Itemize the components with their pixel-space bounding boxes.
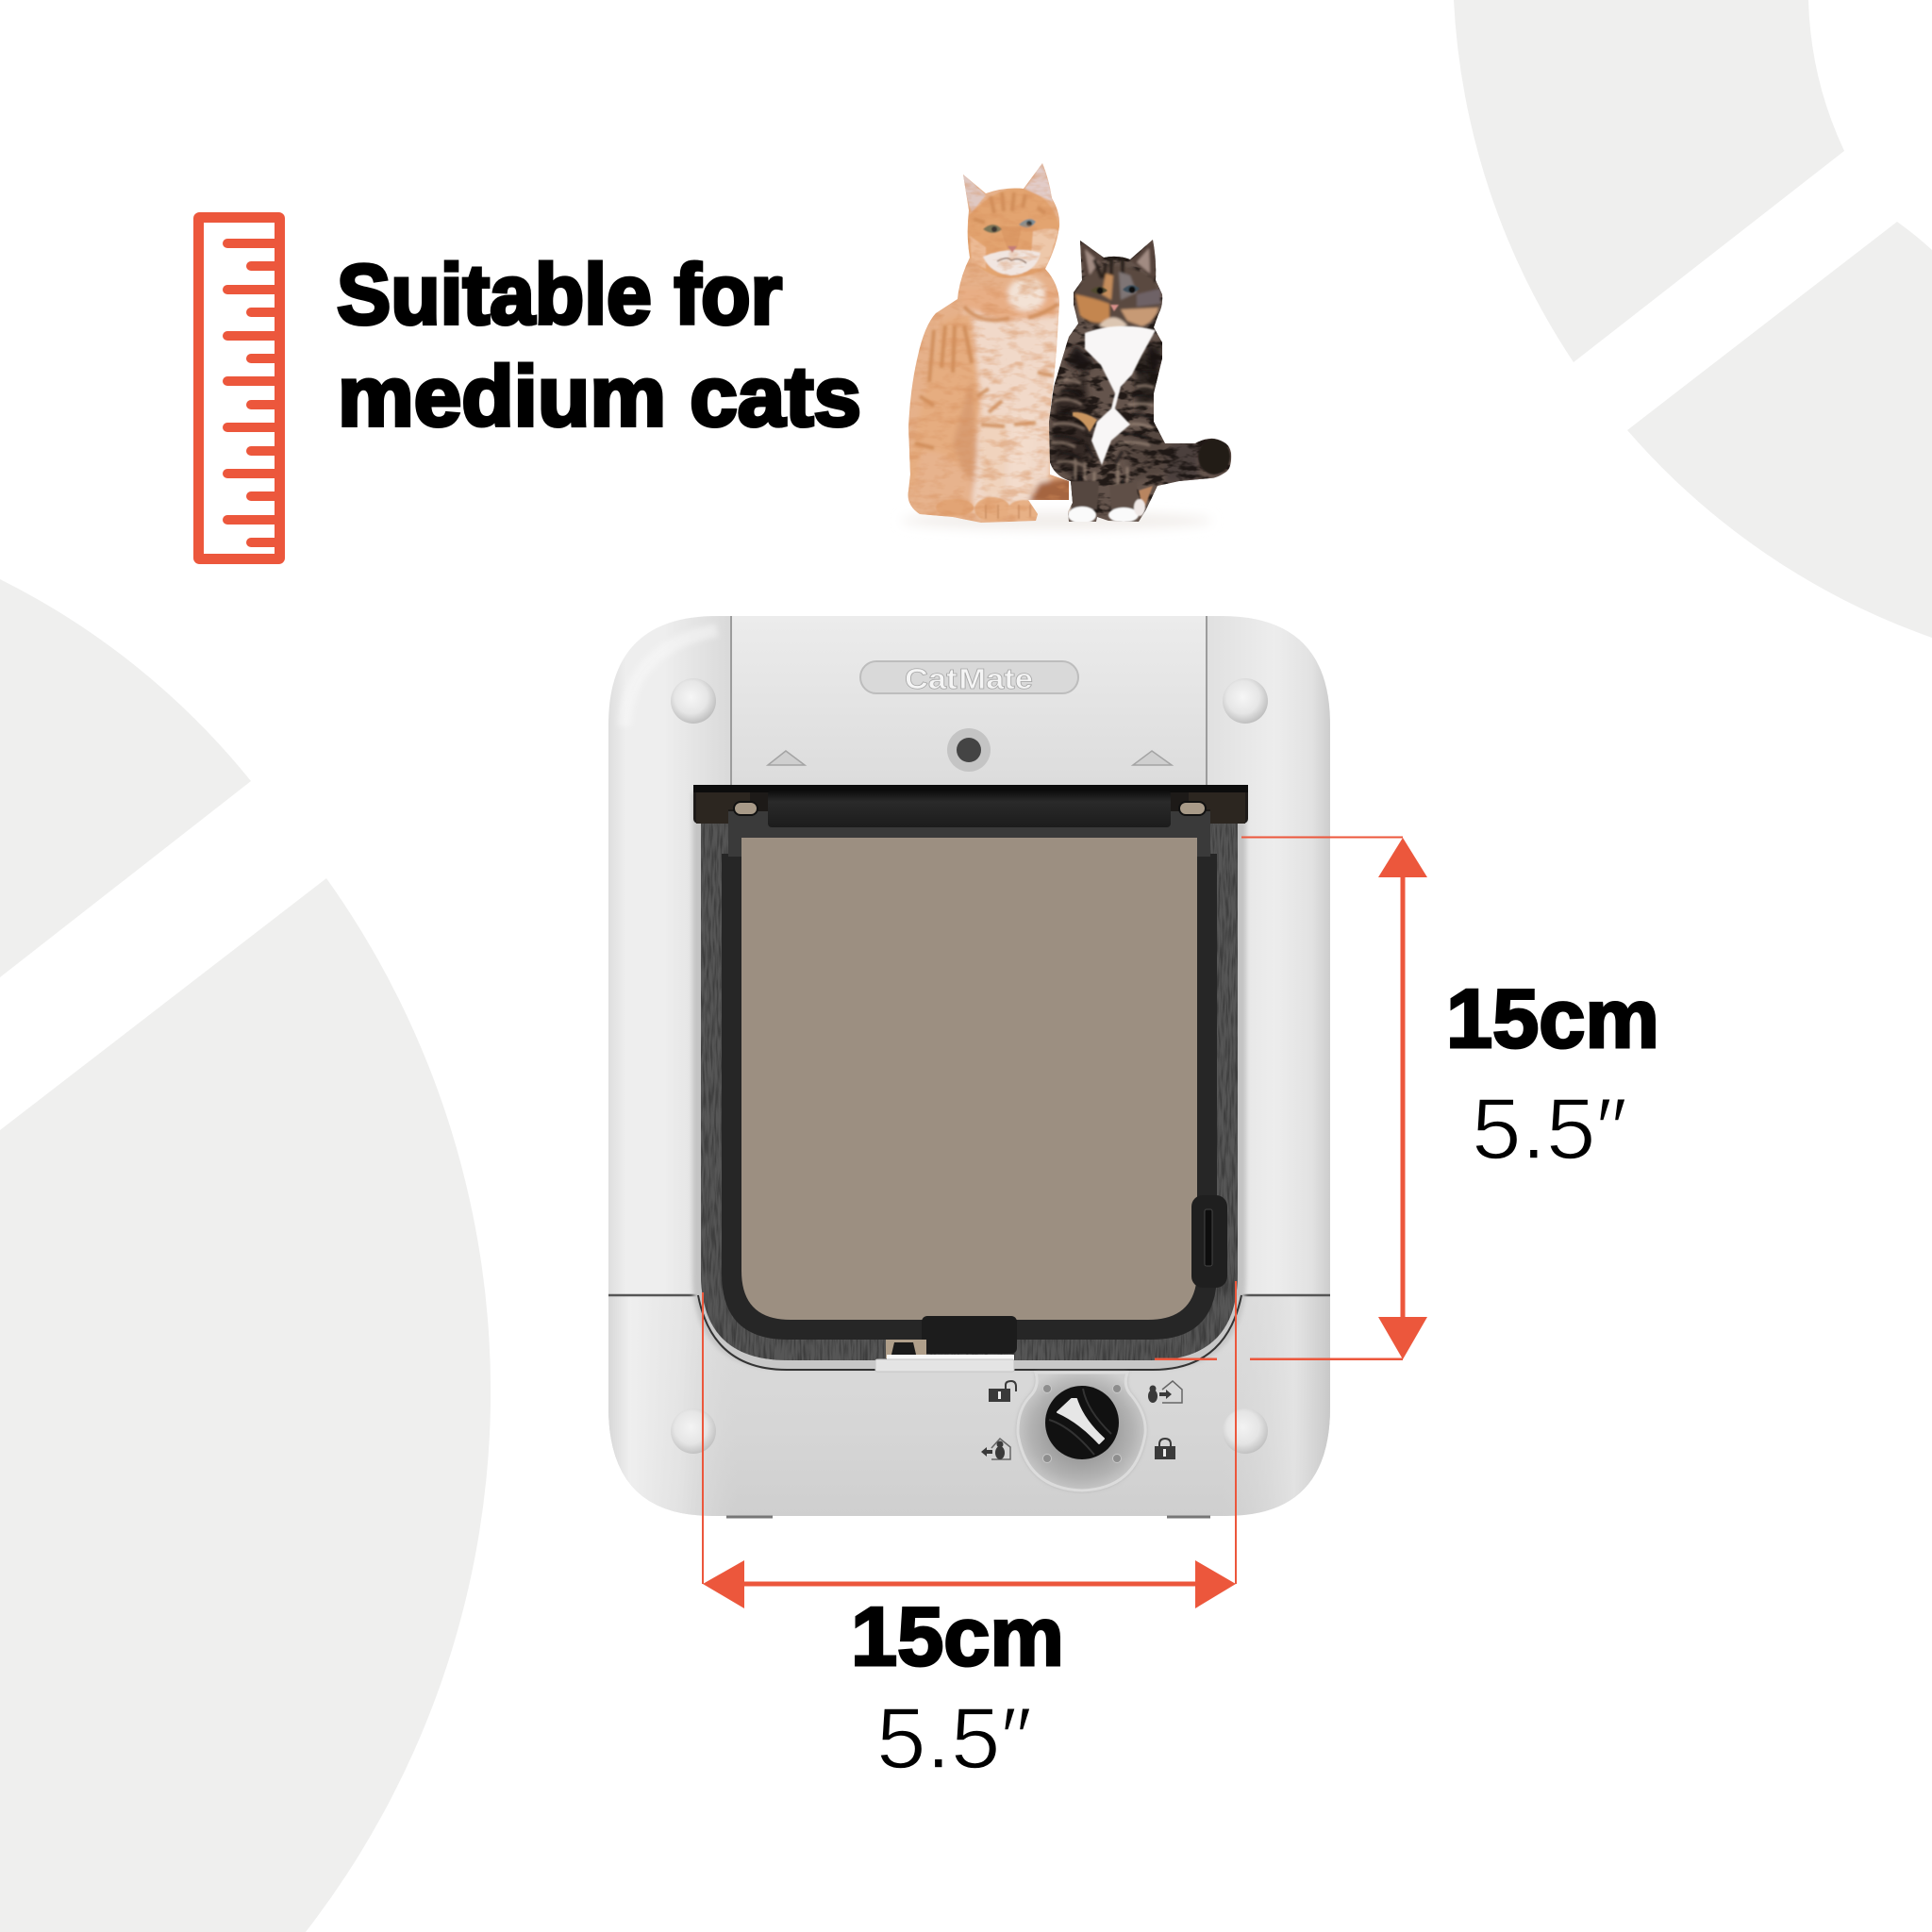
lower panel side shading: [608, 1295, 1330, 1516]
lower panel: [608, 1295, 1330, 1516]
label: height 15cm: 15cm: [1446, 972, 1659, 1065]
door halo: [692, 792, 1246, 1370]
icon: unlocked: [989, 1381, 1016, 1402]
bottom latch: [875, 1316, 1017, 1372]
heading: suitable for medium cats: [337, 248, 861, 444]
feet shadows: [726, 1515, 1210, 1519]
rotary lock: [1018, 1373, 1145, 1491]
heading: suitable for medium cats: medium cats: [338, 350, 861, 444]
top cover: [731, 616, 1207, 795]
top frame: [693, 785, 1248, 857]
heading: suitable for medium cats: Suitable for: [337, 248, 782, 342]
rim: [722, 854, 1217, 1340]
logo plate: Cat Mate: [905, 662, 1033, 695]
contour line: [698, 1295, 1241, 1370]
side clip: [1191, 1195, 1227, 1288]
sensor: [947, 728, 991, 772]
illustration: tortoiseshell cat: [1042, 236, 1236, 528]
logo plate: [860, 661, 1078, 695]
illustration: ginger cat: [901, 160, 1075, 528]
label: width 15cm: 15cm: [851, 1590, 1064, 1683]
background shape: bottom left ring upper piece: [0, 579, 251, 977]
illustration: cat flap door: [608, 616, 1330, 1517]
icon: locked: [1155, 1439, 1175, 1459]
brush seal: [701, 824, 1238, 1360]
right side panel: [1207, 616, 1330, 1295]
illustration: floor shadow under cats: [901, 512, 1212, 529]
left side panel: [608, 616, 731, 1295]
label: height 5.5 inches: 5.5″: [1472, 1081, 1627, 1177]
background shape: top right ring upper piece: [1454, 0, 1844, 362]
icon: ruler: [198, 217, 279, 558]
background shape: bottom left ring lower piece: [0, 878, 491, 1932]
top corner highlight: [625, 630, 717, 726]
flap: [741, 838, 1197, 1320]
screw caps: [671, 678, 1268, 1454]
dimension arrow: width: [702, 1281, 1237, 1608]
icon: cat in: [981, 1439, 1010, 1459]
arrow marks: [768, 751, 1172, 765]
dimension arrow: height: [1155, 836, 1427, 1360]
background shape: top right ring lower piece: [1627, 222, 1932, 638]
icon: cat out: [1148, 1381, 1182, 1403]
label: width 5.5 inches: 5.5″: [876, 1690, 1032, 1787]
